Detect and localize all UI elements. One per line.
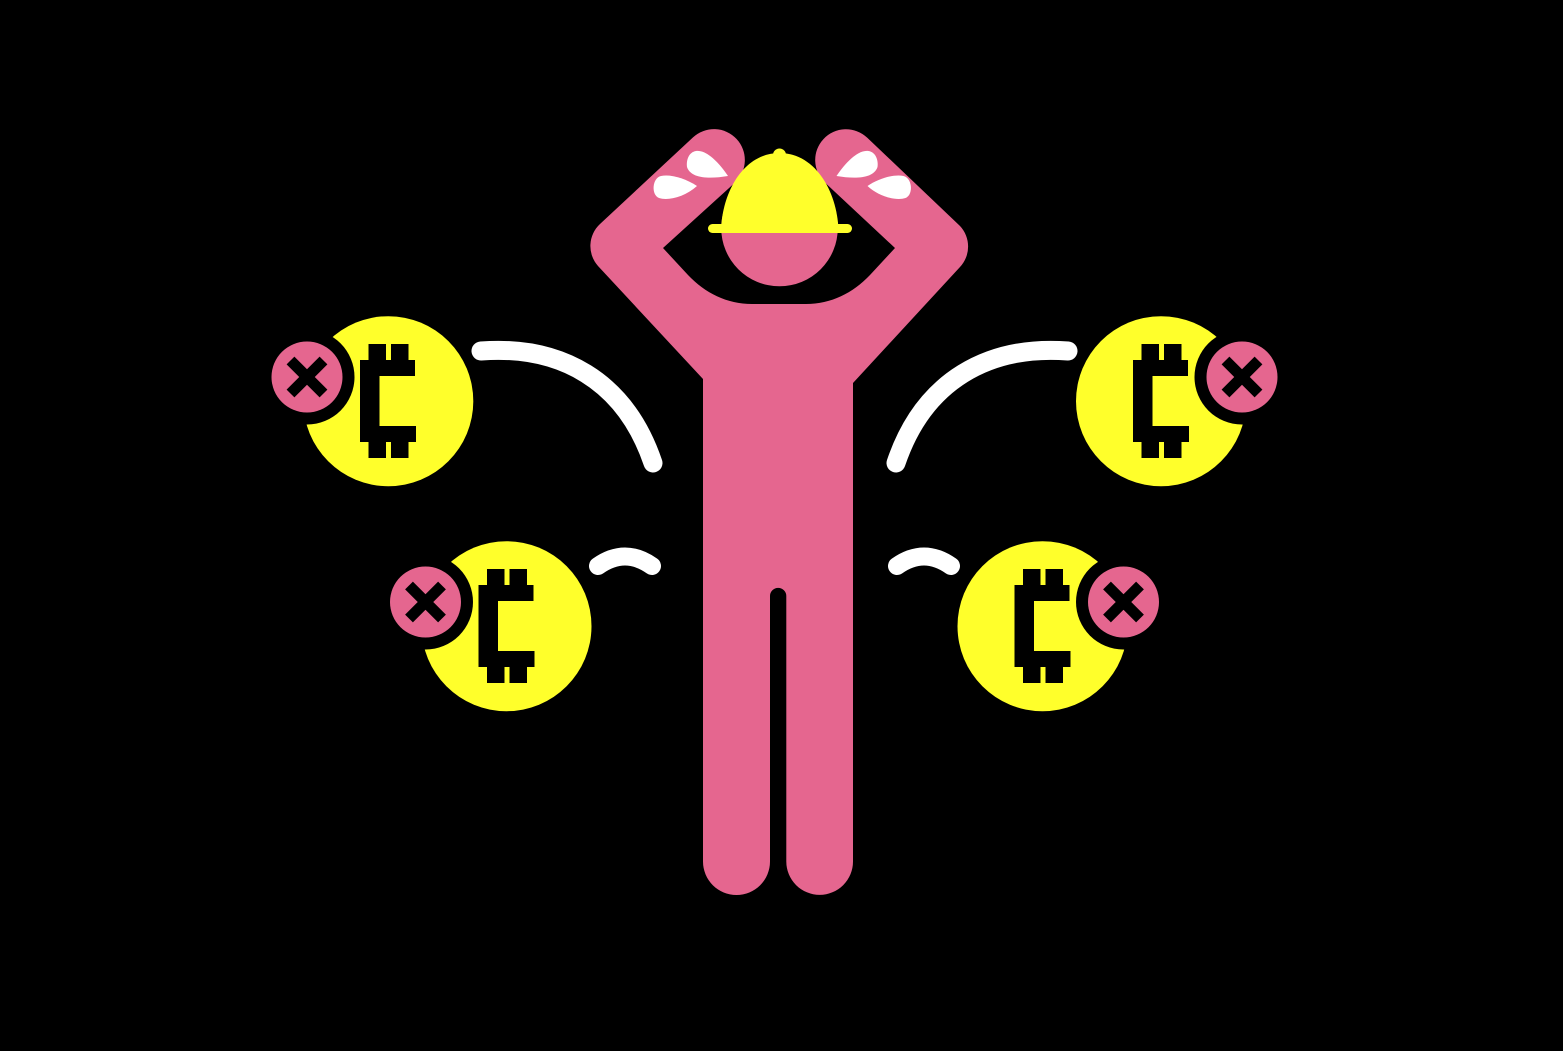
figure: miner — [590, 129, 968, 895]
coin: lower right — [958, 541, 1171, 711]
teardrops — [654, 151, 911, 199]
arrow: lower right arc — [897, 556, 951, 566]
coin: upper right — [1076, 316, 1290, 486]
coin: upper left — [260, 316, 473, 486]
hard hat — [708, 148, 852, 233]
body with raised arms and legs — [590, 129, 968, 895]
arrow: lower left arc — [598, 556, 652, 566]
arrow: upper right arc — [896, 350, 1068, 463]
arrow: upper left arc — [481, 350, 653, 463]
coin: lower left — [378, 541, 592, 711]
head — [721, 170, 838, 286]
